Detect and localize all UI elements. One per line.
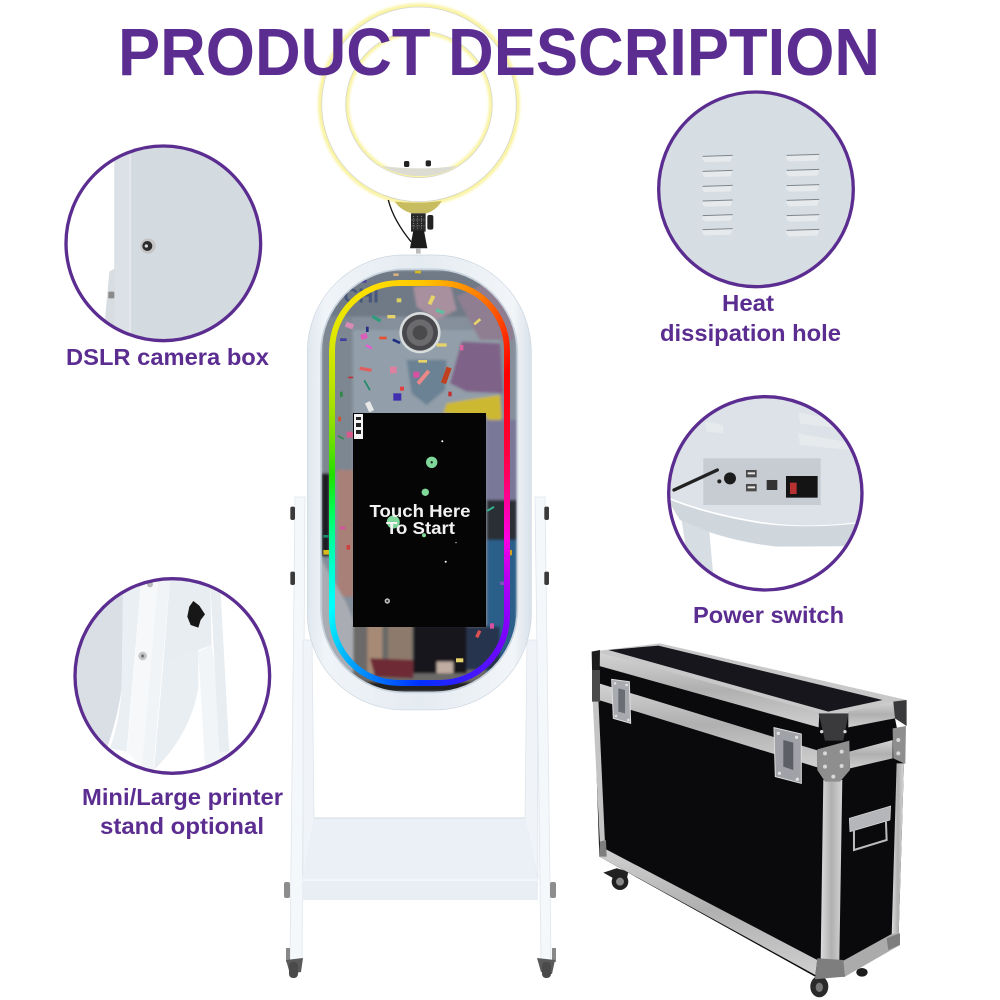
ring light bbox=[321, 6, 517, 254]
shelf bbox=[302, 818, 538, 900]
photo booth stand legs bbox=[284, 497, 556, 978]
mirror reflection scene: CHI bbox=[343, 285, 379, 308]
confetti bbox=[323, 271, 512, 662]
label: heat dissipation hole bbox=[660, 290, 841, 346]
camera lens bbox=[399, 312, 441, 353]
flight case bbox=[592, 643, 907, 997]
centre band bbox=[593, 682, 817, 767]
front vertical post bbox=[821, 780, 842, 962]
label: DSLR camera box: DSLR camera box bbox=[66, 344, 269, 370]
callout circle: power switch bbox=[667, 395, 864, 592]
status icons bbox=[354, 414, 363, 439]
vents bbox=[702, 154, 819, 236]
label: printer stand optional bbox=[82, 784, 283, 839]
casters bbox=[286, 948, 556, 978]
top face bbox=[592, 643, 907, 713]
mirror reflection scene bbox=[322, 270, 517, 692]
corner brackets bbox=[592, 670, 907, 979]
label: heat dissipation hole: dissipation hole bbox=[660, 320, 841, 346]
pivot bolts bbox=[290, 507, 549, 585]
wheels bbox=[603, 868, 868, 997]
green touch dots bbox=[385, 440, 457, 604]
label: printer stand optional: stand optional bbox=[100, 813, 264, 839]
shelf bolts bbox=[284, 882, 556, 898]
latches bbox=[612, 679, 801, 783]
mirror booth bbox=[290, 255, 549, 710]
mirror frame bbox=[307, 255, 531, 710]
lid trim bbox=[599, 653, 819, 727]
rivets bbox=[820, 730, 900, 779]
left edge bbox=[593, 698, 605, 845]
callout circle: printer stand bbox=[73, 577, 272, 775]
case body backing bbox=[593, 653, 904, 977]
label: printer stand optional: Mini/Large printer bbox=[82, 784, 283, 810]
touch prompt bbox=[370, 501, 471, 538]
touch prompt: To Start bbox=[386, 518, 455, 538]
LED rainbow strip bbox=[329, 280, 510, 686]
label: heat dissipation hole: Heat bbox=[722, 290, 774, 316]
touch prompt: Touch Here bbox=[370, 501, 471, 521]
handle bbox=[849, 806, 891, 850]
label: power switch: Power switch bbox=[693, 602, 844, 628]
callout circle: heat dissipation hole bbox=[657, 90, 855, 288]
callout circle: DSLR camera box bbox=[60, 140, 270, 347]
title: PRODUCT DESCRIPTION bbox=[118, 15, 880, 90]
right side trims bbox=[848, 702, 895, 727]
touch screen bbox=[353, 413, 486, 627]
bottom edge bbox=[599, 843, 817, 975]
